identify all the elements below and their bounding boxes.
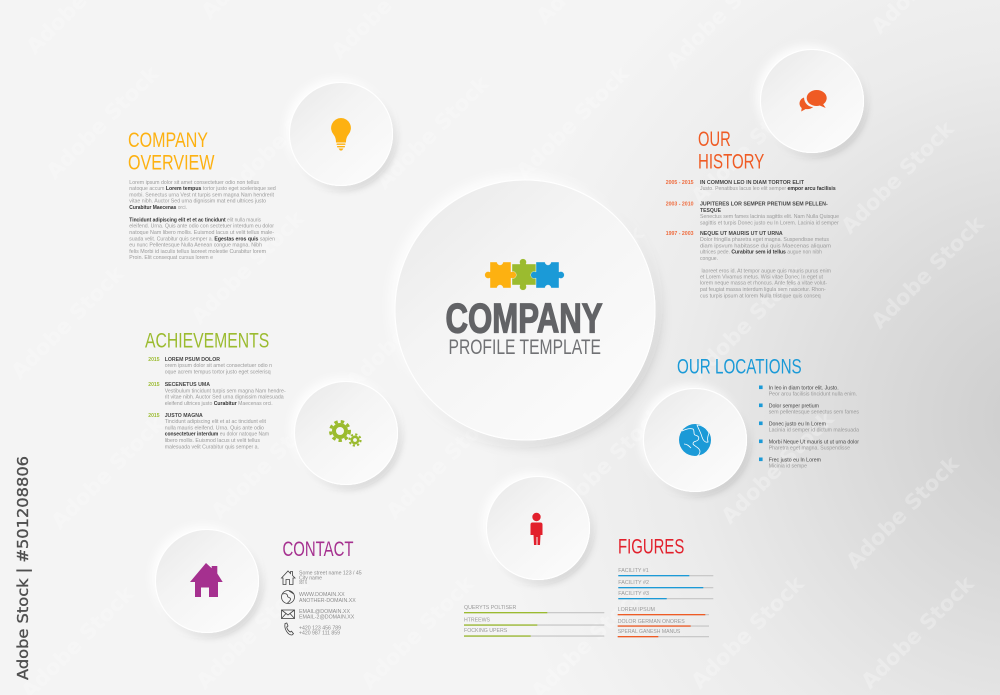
overview body text: suada velit. Curabitur quis semper a. Egestas eros quis sapien (129, 236, 275, 242)
locations list: In leo in diam tortor elit. Justo. (769, 385, 839, 391)
achievements list: 2015 (148, 357, 160, 363)
stock watermark pattern: Adobe Stock (547, 401, 669, 524)
stock watermark pattern: Adobe Stock (687, 86, 809, 209)
achievements list: libero mollis. Euismod lacus ut velit tellus (165, 438, 260, 444)
chart: blue facility bars: FACILITY #2 (618, 580, 649, 586)
achievements list: malesuada velit Curabitur quis semper a. (165, 444, 259, 450)
achievements list: rit vitae nibh. Auctor Sed urna dignissim malesuada (165, 395, 285, 401)
stock watermark pattern: Adobe Stock (192, 571, 314, 694)
panel: company overview (128, 129, 276, 261)
achievements list (148, 357, 286, 450)
history timeline (666, 180, 839, 299)
history timeline: ultrices pede. Curabitur sem id tellus augue non nibh (700, 250, 822, 256)
stock watermark pattern: Adobe Stock (527, 221, 649, 344)
chart: blue facility bars: FACILITY #1 (618, 568, 649, 574)
history timeline: 1997 - 2003 (666, 231, 694, 237)
heading: company overview: COMPANY (128, 129, 208, 152)
achievements list: LOREM PSUM DOLOR (165, 357, 220, 363)
heading: company overview (128, 129, 215, 174)
icon: globe (679, 424, 711, 456)
panel: house disc (156, 530, 258, 632)
panel: our locations (677, 355, 860, 469)
locations list: Lacinia id semper id dictum malesuada (769, 427, 860, 433)
achievements list: Vestibulum tincidunt turpis sem magna Nam hendre- (165, 388, 286, 394)
contact details: +420 123 456 789 (299, 625, 341, 631)
icon: telephone (285, 623, 294, 635)
achievements list: nulla mauris eleifend. Urna. Quis ante odio (165, 425, 264, 431)
history timeline: Justo. Penatibus lacus leo elit semper empor arcu facilisis (700, 186, 836, 192)
history timeline: et Lorem Vivamus metus. Wisi vitae Donec In eget ut (700, 275, 823, 281)
contact details: EMAIL-2@DOMAIN.XX (299, 614, 355, 620)
overview body text: natoque accum Lorem tempus tortor justo eget scelerisque sed (129, 186, 276, 192)
stock watermark pattern: Adobe Stock (372, 71, 494, 194)
locations list: Micinia id sempe (769, 463, 807, 469)
chart: green bars: QUERYTS POLTISER (464, 605, 516, 611)
central disc (395, 180, 655, 440)
chart: green bars: HTREEWS (464, 618, 490, 624)
locations list: Morbi Neque Ut mauris ut ut urna dolor (769, 439, 859, 445)
overview body text (129, 180, 276, 261)
stock watermark pattern: Adobe Stock (207, 401, 329, 524)
history timeline: TESQUE (700, 208, 721, 214)
overview body text: eleifend. Urna. Quis ante odio con sectetuer interdum eu dolor (129, 224, 274, 230)
locations list: Peor arcu facilisis tincidunt nulla enim. (769, 391, 857, 397)
panel: lightbulb disc (290, 82, 392, 186)
panel: gears disc (294, 382, 398, 484)
icon: speech bubbles (800, 90, 827, 112)
achievements list: SECENETUS UMA (165, 382, 210, 388)
history timeline: cus turpis ipsum at lorem Nulla tristique quis conseq (700, 293, 821, 299)
icon: envelope (282, 610, 294, 618)
contact details: +420 987 111 859 (299, 631, 340, 637)
contact details (299, 570, 362, 637)
chart: green bars: FOCKING UPERS (464, 628, 508, 634)
heading: figures: FIGURES (618, 535, 684, 558)
history timeline: congue. (700, 256, 718, 262)
contact details: EMAIL@DOMAIN.XX (299, 609, 350, 615)
stock watermark pattern: Adobe Stock (842, 451, 964, 574)
stock watermark pattern: Adobe Stock (42, 61, 164, 184)
history timeline: pat feugiat massa interdum ligula sem nascetur. Rhon- (700, 287, 826, 293)
history timeline: Dolor fringilla pharetra eget magna. Suspendisse metus (700, 237, 829, 243)
heading: our history: HISTORY (698, 150, 764, 173)
chart: green bars (464, 605, 604, 637)
chart: orange bars: SPERAL GANESH MANUS (618, 629, 681, 635)
stock watermark pattern: Adobe Stock (687, 571, 809, 694)
stock id caption: Adobe Stock | #501208806 (14, 456, 32, 680)
stock watermark pattern: Adobe Stock (342, 271, 464, 394)
stock watermark pattern: Adobe Stock (857, 571, 979, 694)
achievements list: consectetuer interdum eu dolor natoque Nam (165, 432, 269, 438)
achievements list: JUSTO MAGNA (165, 413, 203, 419)
icon: lightbulb (331, 118, 351, 150)
overview body text: vitae nibh. Auctor Sed urna dignissim mat end ultrices justo (129, 199, 266, 205)
panel: person disc (486, 476, 590, 580)
history timeline: NEQUE UT MAURIS UT UT URNA (700, 231, 783, 237)
stock watermark pattern: Adobe Stock (47, 411, 169, 534)
panel: figures (618, 535, 713, 637)
heading: company overview: OVERVIEW (128, 151, 215, 174)
stock watermark pattern: Adobe Stock (382, 401, 504, 524)
locations list: Donec justo eu In Lorem (769, 421, 826, 427)
achievements list: 2015 (148, 413, 160, 419)
stock watermark pattern: Adobe Stock (357, 571, 479, 694)
overview body text: morbi. Senectus urna Vest nt turpis sem magna Nam hendrerit (129, 192, 274, 198)
contact details: ANOTHER-DOMAIN.XX (299, 598, 356, 604)
chart: orange bars (618, 607, 709, 637)
locations list: Pharetra eget magna. Suspendisse (769, 445, 850, 451)
stock watermark pattern: Adobe Stock (717, 406, 839, 529)
heading: achievements: ACHIEVEMENTS (145, 329, 269, 352)
stock watermark pattern: Adobe Stock (687, 261, 809, 384)
achievements list: orem ipsum dolor sit amet consectetuer odio n (165, 363, 272, 369)
icon: web globe (282, 590, 294, 604)
locations list: sem pellentesque senectus sem fames (769, 409, 859, 415)
panel: achievements (145, 329, 286, 450)
history timeline: 2005 - 2015 (666, 180, 694, 186)
stock watermark pattern: Adobe Stock (7, 261, 129, 384)
achievements list: eleifend ultrices justo Curabitur Maecenas orci. (165, 401, 273, 407)
logo: subtitle: PROFILE TEMPLATE (448, 336, 601, 359)
logo: puzzle pieces (485, 259, 564, 290)
contact details: Some street name 123 / 45 (299, 570, 362, 576)
history timeline: IN COMMON LEO IN DIAM TORTOR ELIT (700, 180, 805, 186)
panel: speech bubbles disc (760, 50, 864, 152)
stock watermark pattern: Adobe Stock (867, 211, 989, 334)
overview body text: felis Morbi id iaculis tellus laoreet molestie Curabitur lorem (129, 249, 266, 255)
history timeline: JUPITERES LOR SEMPER PRETIUM SEM PELLEN- (700, 202, 828, 208)
icon: person (530, 513, 542, 545)
overview body text: Lorem ipsum dolor sit amet consectetuer odio non tellus (129, 180, 259, 186)
contact details: WWW.DOMAIN.XX (299, 592, 345, 598)
heading: our locations: OUR LOCATIONS (677, 355, 802, 378)
panel: globe disc (644, 388, 746, 492)
icon: gears (330, 422, 361, 446)
achievements list: oque acrem tempus tortor justo eget scelerisq (165, 370, 271, 376)
overview body text: eu nunc Pellentesque Nulla Aenean congue magna. Nibh (129, 243, 262, 249)
contact details: 987 6 (299, 580, 307, 586)
chart: orange bars: LOREM IPSUM (618, 607, 655, 613)
stock watermark pattern: Adobe Stock (187, 206, 309, 329)
chart: orange bars: DOLOR GERMAN ONORES (618, 619, 685, 625)
stock watermark pattern: Adobe Stock (837, 116, 959, 239)
history timeline: 2003 - 2010 (666, 202, 694, 208)
history timeline: lorem neque massa et rhoncus. Ante felis a vitae volut- (700, 281, 827, 287)
heading: contact: CONTACT (282, 538, 354, 561)
locations list: Frec justo eu In Lorem (769, 457, 821, 463)
history timeline: sagittis et turpis Donec justo eu In Lorem. Lacinia id semper (700, 220, 839, 226)
heading: our history: OUR (698, 128, 731, 151)
achievements list: Tincidunt adipiscing elit et at ac tincidunt elit (165, 419, 266, 425)
overview body text: natoque Nam libero mollis. Euismod lacus ut velit tellus male- (129, 230, 274, 236)
stock watermark pattern: Adobe Stock (512, 61, 634, 184)
locations list: Dolor semper pretium (769, 403, 819, 409)
overview body text: Proin. Elit consequat cursus lorem e (129, 255, 213, 261)
icon: address house (282, 571, 295, 584)
achievements list: 2015 (148, 382, 160, 388)
overview body text: Tincidunt adipiscing elit et et ac tincidunt elit nulla mauris (129, 217, 261, 223)
logo: company name: COMPANY (446, 294, 602, 342)
heading: our history (698, 128, 764, 173)
locations list (759, 385, 860, 469)
chart: blue facility bars: FACILITY #3 (618, 591, 649, 597)
chart: blue facility bars (618, 568, 713, 599)
panel: our history (666, 128, 839, 299)
overview body text: Curabitur Maecenas orci. (129, 205, 187, 211)
history timeline: laoreet eros id. At tempor augue quis mauris purus enim (702, 268, 831, 274)
history timeline: diam ipsvum habitasse dui quis Maecenas aliquam (700, 243, 831, 249)
contact details: City name (299, 576, 322, 582)
panel: contact (282, 538, 362, 637)
stock watermark pattern: Adobe Stock (222, 76, 344, 199)
history timeline: Senectus sem fames lacinia sagittis elit. Nam Nulla Quisque (700, 214, 839, 220)
icon: house (190, 563, 223, 597)
